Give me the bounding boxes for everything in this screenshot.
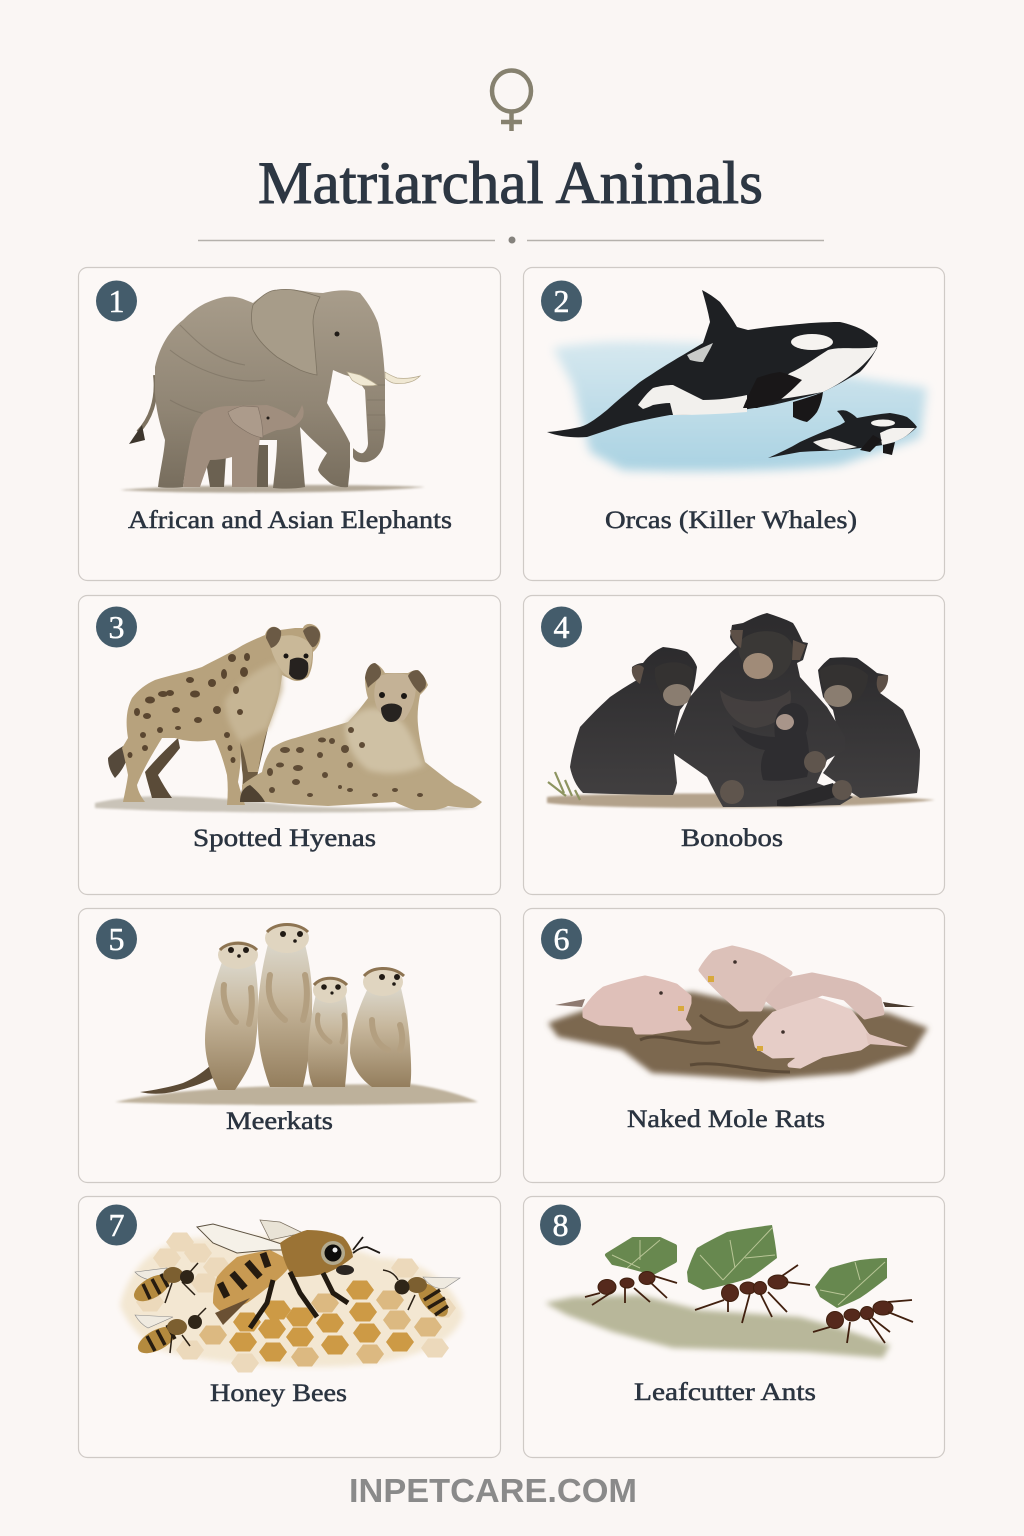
panel: Naked Mole Rats — [524, 908, 944, 1182]
worker bee 1 — [130, 1263, 198, 1307]
number badge 5: 5 — [108, 921, 124, 957]
number badge 4 — [541, 606, 582, 648]
mother bonobo — [670, 613, 853, 807]
illustration: naked mole rats — [548, 948, 928, 1080]
label: African and Asian Elephants — [128, 507, 452, 534]
number badge 3 — [96, 606, 137, 648]
mole rat 1 — [585, 978, 689, 1032]
number badge 4: 4 — [554, 609, 570, 645]
ants — [585, 1265, 913, 1343]
label: Spotted Hyenas — [193, 825, 376, 852]
number badge 2 — [541, 280, 582, 322]
label: Orcas (Killer Whales) — [605, 507, 857, 534]
queen bee — [197, 1220, 380, 1328]
worker bee 2 — [134, 1308, 206, 1359]
illustration: meerkats — [115, 923, 478, 1105]
number badge 6 — [541, 918, 582, 960]
baby bonobo — [732, 703, 840, 806]
lying hyena — [240, 663, 482, 810]
panel: Bonobos — [524, 596, 944, 894]
panel: Spotted Hyenas — [78, 596, 500, 894]
label: Bonobos — [681, 825, 783, 852]
label: Meerkats — [226, 1108, 333, 1135]
standing hyena — [108, 624, 321, 805]
title: Matriarchal Animals — [258, 150, 763, 216]
right bonobo — [818, 657, 920, 798]
illustration: elephants — [120, 289, 425, 493]
panel: Meerkats — [78, 908, 500, 1182]
number badge 2: 2 — [554, 283, 570, 319]
divider with dot — [198, 236, 824, 244]
panel: Orcas — [524, 268, 944, 580]
number badge 7: 7 — [108, 1207, 124, 1243]
label: Honey Bees — [210, 1380, 347, 1407]
number badge 6: 6 — [554, 921, 570, 957]
mole rat 4 — [755, 1000, 872, 1066]
number badge 5 — [96, 918, 137, 960]
honeycomb — [120, 1232, 463, 1372]
label: Leafcutter Ants — [634, 1379, 816, 1406]
mole rat 2 — [701, 948, 790, 1009]
meerkat 1 — [205, 941, 258, 1090]
number badge 7 — [96, 1204, 137, 1246]
panel: Honey Bees — [78, 1196, 500, 1458]
panel: Leafcutter Ants — [524, 1196, 944, 1458]
meerkat 2 — [258, 923, 312, 1087]
baby elephant — [183, 405, 304, 487]
illustration: bonobos — [547, 613, 935, 808]
number badge 8 — [540, 1204, 581, 1246]
number badge 1 — [96, 280, 137, 322]
number badge 1: 1 — [108, 283, 124, 319]
number badge 3: 3 — [108, 609, 124, 645]
illustration: hyenas — [95, 624, 482, 812]
leaves — [607, 1239, 675, 1273]
number badge 8: 8 — [552, 1207, 568, 1243]
label: Naked Mole Rats — [627, 1106, 825, 1133]
calf orca — [768, 410, 917, 458]
illustration: honey bees — [120, 1220, 463, 1372]
icon: female symbol — [492, 70, 531, 131]
meerkat 4 — [350, 968, 411, 1087]
left bonobo — [570, 647, 697, 795]
footer watermark: INPETCARE.COM — [349, 1472, 637, 1509]
illustration: orcas — [547, 290, 927, 471]
illustration: leafcutter ants — [545, 1225, 913, 1358]
mole rat 3 — [768, 975, 882, 1017]
meerkat 3 — [308, 977, 348, 1087]
panel: African and Asian Elephants — [78, 268, 500, 580]
worker bee 3 — [383, 1270, 460, 1322]
